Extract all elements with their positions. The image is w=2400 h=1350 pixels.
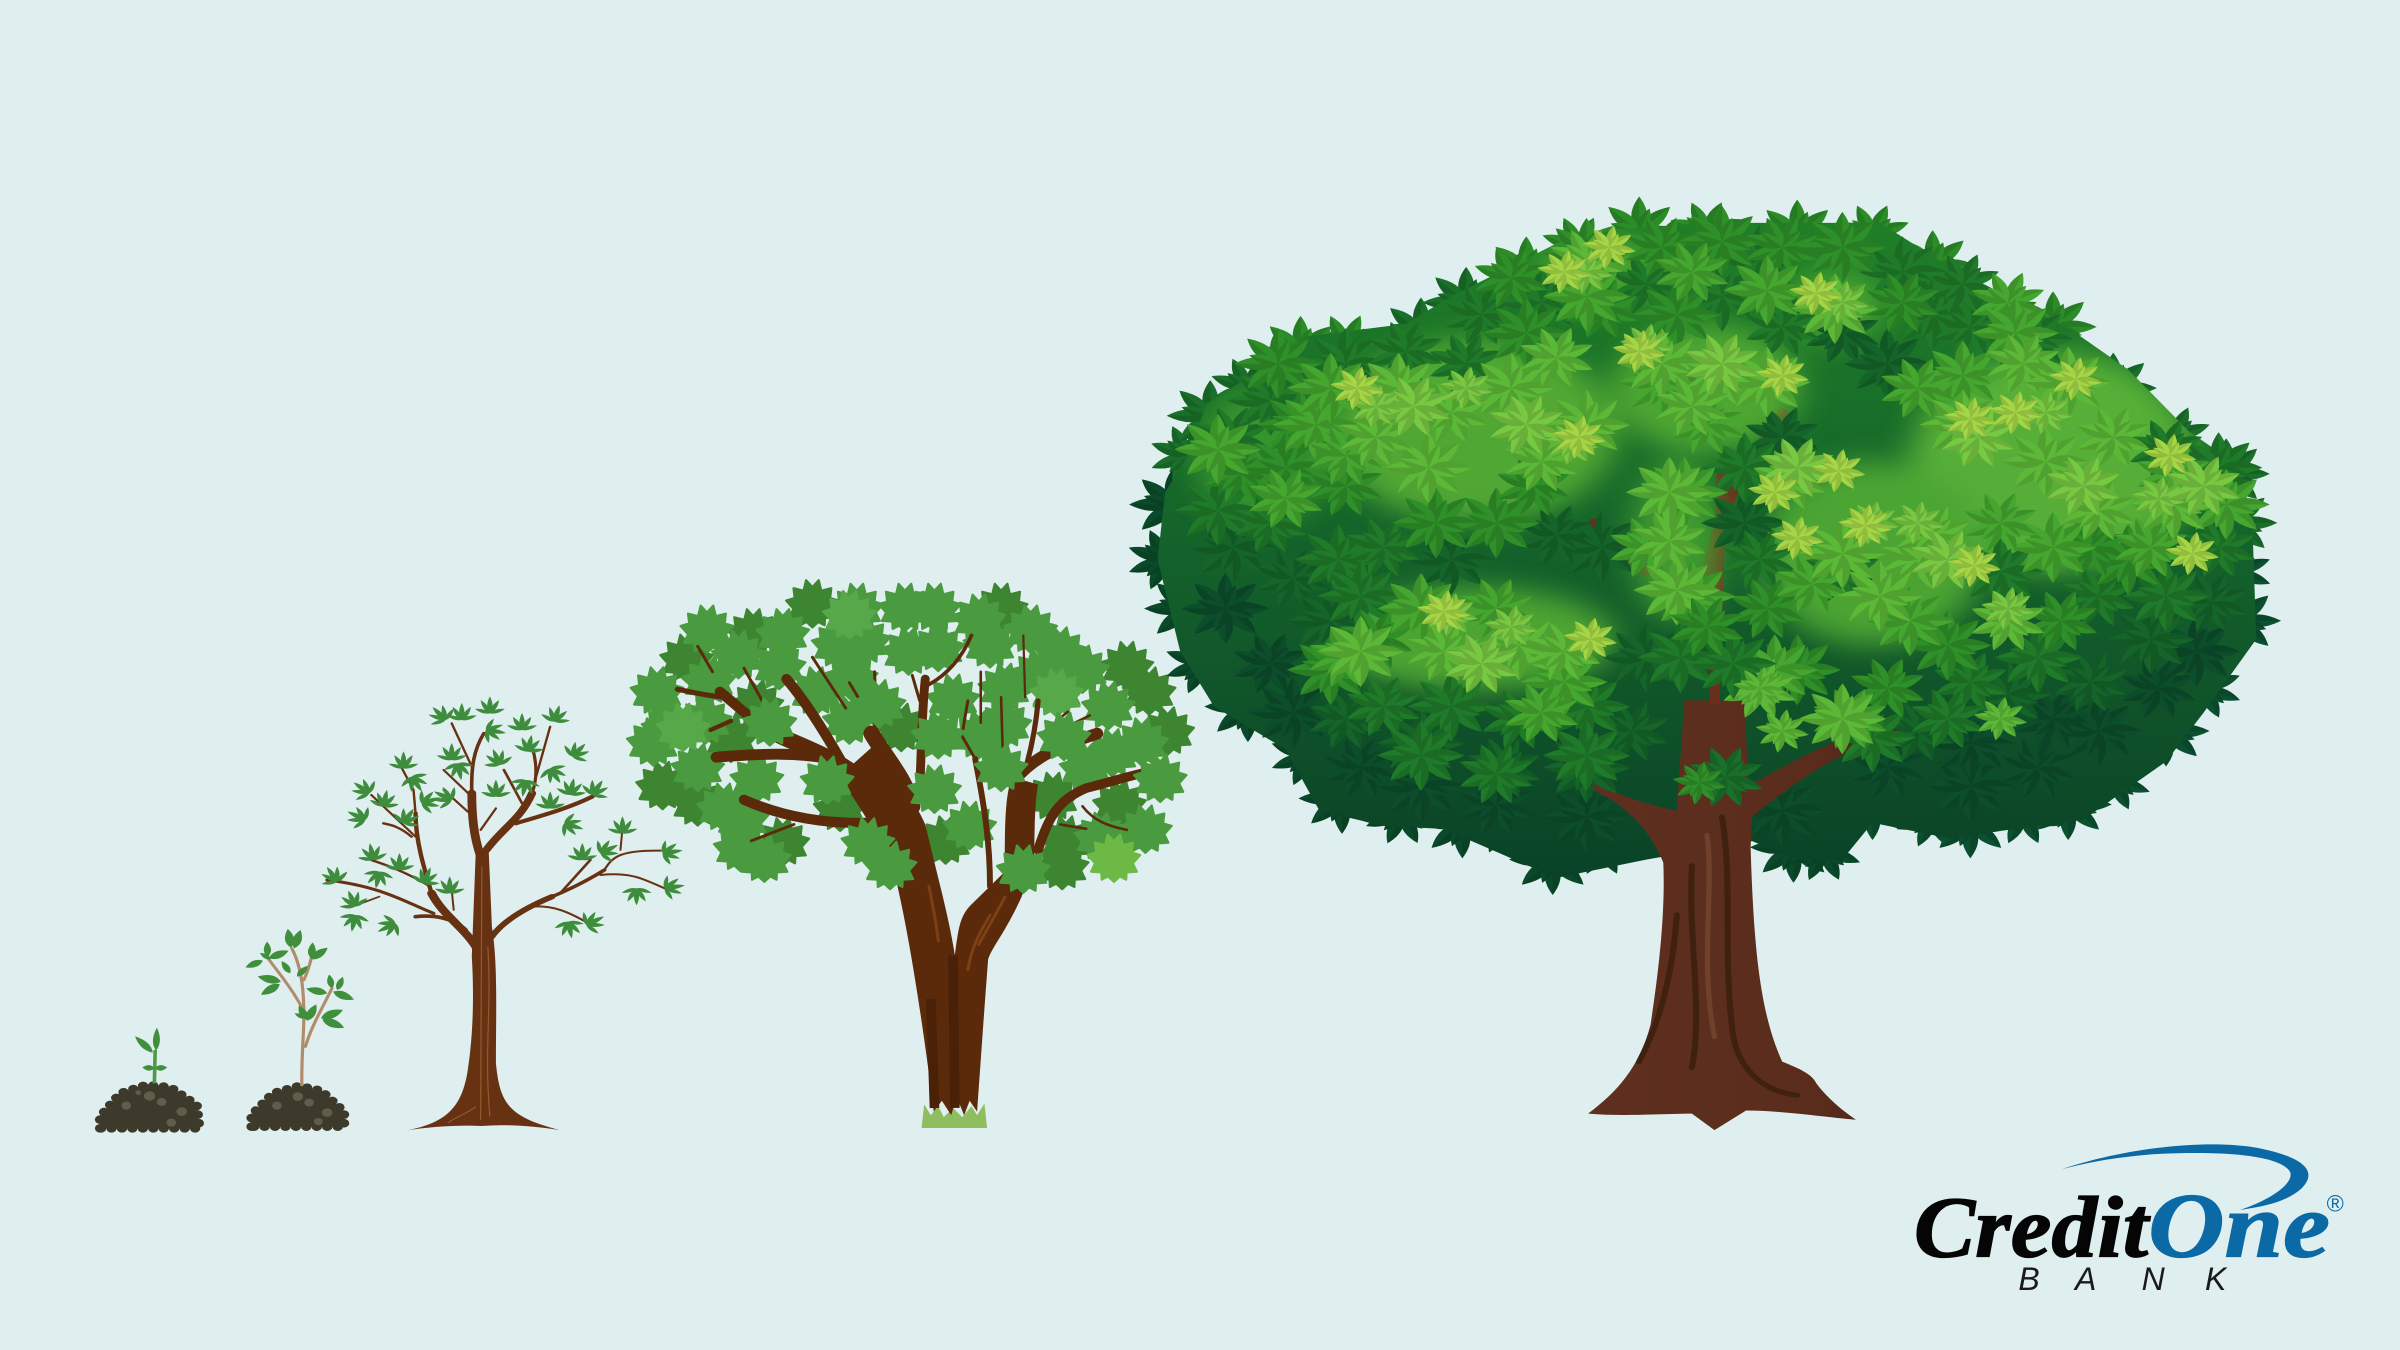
- medium tree front leaf clusters: [744, 680, 1186, 893]
- large tree mid green foliage: [1174, 206, 2270, 815]
- stage 5: large mature tree: [1114, 190, 2285, 1130]
- sapling stem and leaves: [244, 928, 356, 1085]
- soil mound: [252, 1086, 344, 1127]
- stage 4: medium tree: [627, 580, 1194, 1128]
- seedling sprout: [132, 1028, 167, 1083]
- medium tree rear leaf clusters: [627, 580, 1194, 889]
- grass tuft: [922, 1104, 987, 1128]
- young tree trunk and branches: [327, 723, 665, 1131]
- large tree leaves over trunk: [1637, 585, 1791, 818]
- large tree dark edge leaves: [1114, 190, 2285, 895]
- stage 1: seedling on soil mound: [100, 1028, 199, 1128]
- logo swoosh: [2062, 1144, 2308, 1210]
- logo wordmark One: One: [2148, 1175, 2330, 1277]
- stage 3: young tree: [313, 696, 688, 1131]
- large tree trunk: [1564, 413, 1982, 1130]
- large tree soft colour masses: [1195, 235, 2196, 691]
- medium tree trunk and branches: [677, 635, 1149, 1115]
- large tree highlight foliage: [1317, 218, 2255, 756]
- large tree darkest leaves: [1182, 573, 2240, 852]
- logo BANK: BANK: [2018, 1261, 2228, 1297]
- logo registered mark: ®: [2327, 1191, 2344, 1217]
- logo: Credit One Bank: [1914, 1144, 2344, 1297]
- large tree canopy base: [1158, 223, 2256, 878]
- bright accent leaf: [1088, 835, 1140, 882]
- soil mound: [100, 1085, 199, 1128]
- illustration: five stages of tree growth with logo: [94, 196, 2344, 1290]
- young tree leaves: [313, 696, 688, 943]
- stage 2: sapling on soil mound: [244, 928, 356, 1127]
- logo wordmark Credit: Credit: [1914, 1179, 2151, 1276]
